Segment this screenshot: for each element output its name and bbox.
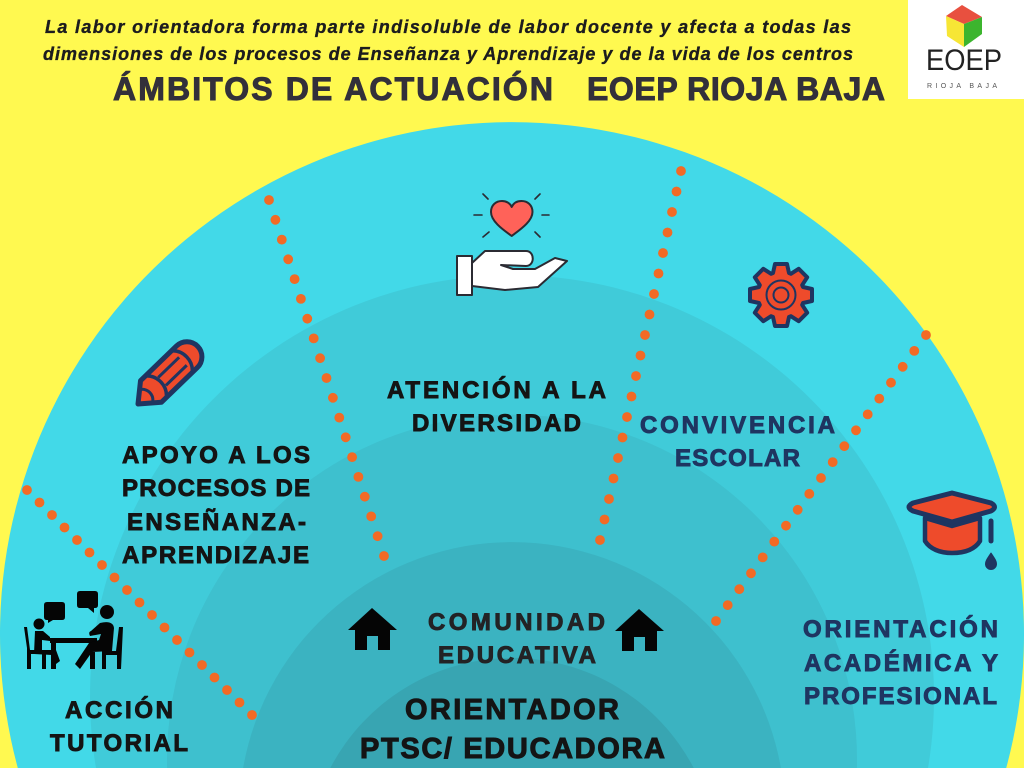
logo: EOEP Rioja Baja: RIOJA BAJA: [927, 83, 997, 90]
label: atención a la diversidad: [387, 376, 606, 437]
label: orientación académica y profesional: ORIENTACIÓN: [803, 615, 998, 643]
icon: house left: [348, 608, 397, 650]
title: [113, 71, 885, 107]
label: comunidad educativa: COMUNIDAD: [428, 609, 605, 636]
label: apoyo a los procesos de enseñanza-aprendizaje: ENSEÑANZA-: [127, 508, 306, 536]
icon: hand holding heart: [457, 194, 567, 295]
label: apoyo a los procesos de enseñanza-aprendizaje: APOYO A LOS: [122, 442, 310, 469]
logo: EOEP Rioja Baja: [908, 0, 1024, 99]
label: apoyo a los procesos de enseñanza-aprendizaje: PROCESOS DE: [122, 475, 310, 502]
icon: graduation cap: [909, 493, 996, 570]
label: convivencia escolar: CONVIVENCIA: [640, 412, 835, 439]
label: atención a la diversidad: DIVERSIDAD: [412, 410, 581, 437]
icon: gear: [750, 264, 812, 326]
label: comunidad educativa: EDUCATIVA: [438, 642, 596, 669]
label: atención a la diversidad: ATENCIÓN A LA: [387, 376, 606, 404]
label: orientador, PTSC / educadora: PTSC/ EDUCADORA: [360, 733, 665, 765]
intro text: La labor orientadora forma parte indisoluble de labor docente y afecta a todas las: [45, 17, 851, 37]
dotted divider lines: [22, 166, 931, 720]
label: convivencia escolar: ESCOLAR: [675, 445, 800, 472]
label: apoyo a los procesos de enseñanza-aprendizaje: APRENDIZAJE: [122, 542, 309, 569]
label: orientación académica y profesional: ACADÉMICA Y: [804, 649, 998, 677]
title: ÁMBITOS DE ACTUACIÓN: [113, 71, 553, 107]
label: orientador, PTSC / educadora: [360, 694, 665, 765]
label: orientación académica y profesional: [803, 615, 998, 710]
icon: house right: [615, 609, 664, 651]
intro text: dimensiones de los procesos de Enseñanza y Aprendizaje y de la vida de los centros: [43, 44, 853, 64]
label: convivencia escolar: [640, 412, 835, 472]
label: acción tutorial: TUTORIAL: [50, 730, 188, 757]
label: comunidad educativa: [428, 609, 605, 669]
label: orientador, PTSC / educadora: ORIENTADOR: [405, 694, 619, 726]
intro text: [43, 17, 853, 64]
label: acción tutorial: ACCIÓN: [65, 696, 173, 724]
icon: pencil: [128, 336, 208, 415]
icon: tutorial conversation at table: [24, 591, 123, 669]
label: acción tutorial: [50, 696, 188, 757]
logo: EOEP Rioja Baja: EOEP: [926, 44, 1002, 77]
title: EOEP RIOJA BAJA: [587, 71, 885, 107]
label: apoyo a los procesos de enseñanza-aprendizaje: [122, 442, 310, 569]
label: orientación académica y profesional: PROFESIONAL: [804, 683, 997, 710]
